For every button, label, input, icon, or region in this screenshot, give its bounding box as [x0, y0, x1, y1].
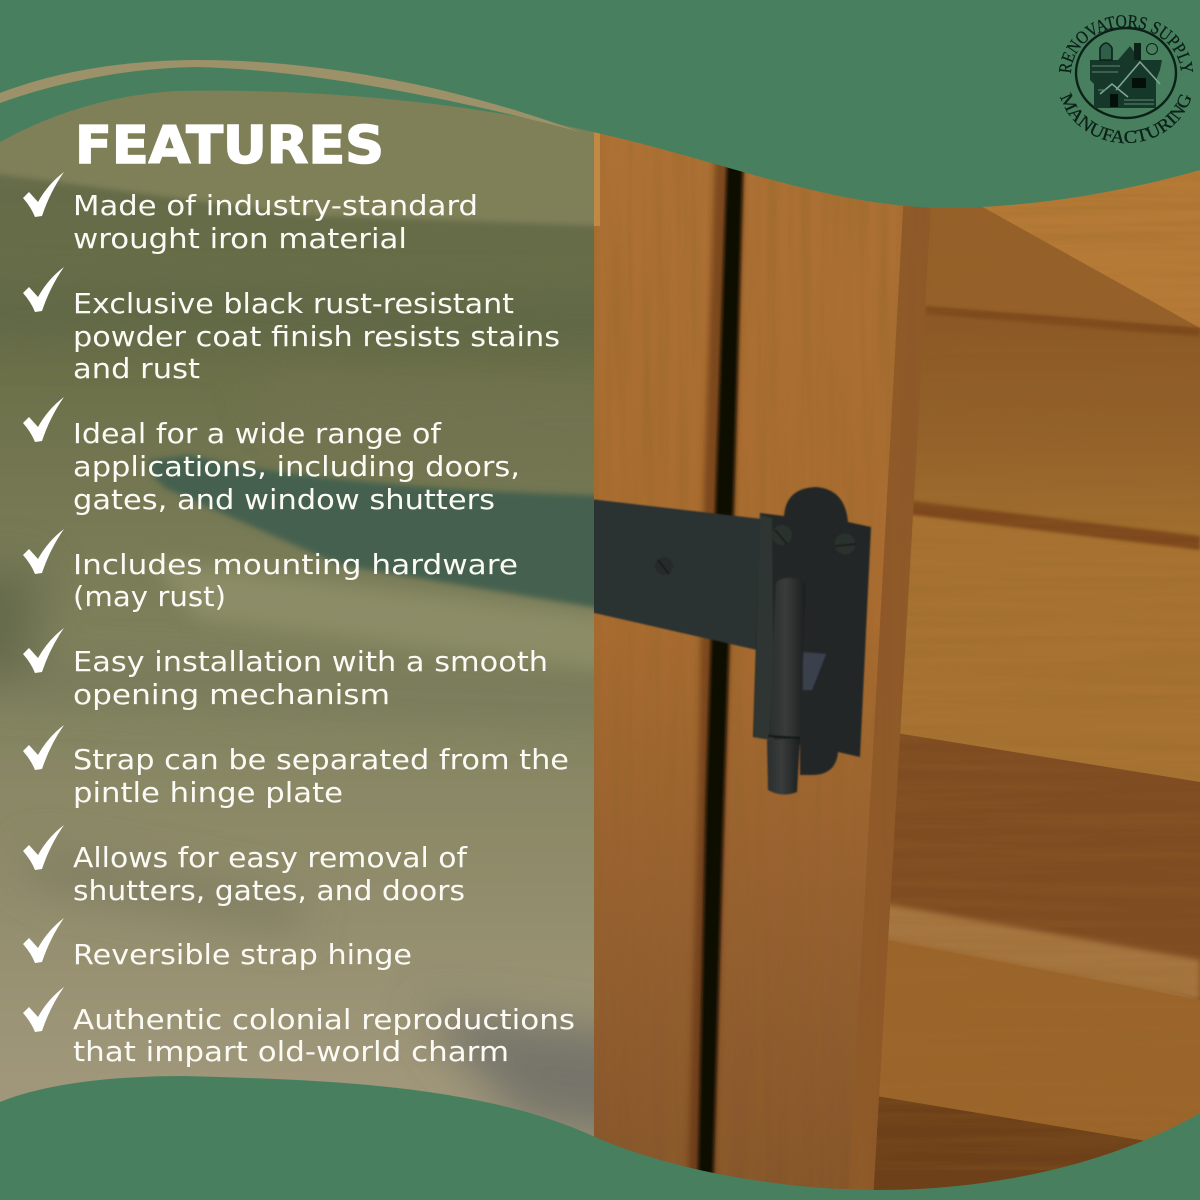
edge highlight	[594, 130, 600, 226]
feature 4: Includes mounting hardware	[73, 549, 518, 581]
feature 1	[23, 172, 478, 255]
feature 2	[23, 267, 560, 385]
feature 3: Ideal for a wide range of	[73, 418, 442, 450]
feature 3: gates, and window shutters	[73, 484, 495, 516]
feature 8: Reversible strap hinge	[73, 939, 412, 971]
logo text: RENOVATORS SUPPLY	[1058, 14, 1194, 74]
feature 3: applications, including doors,	[73, 451, 520, 483]
feature 2: Exclusive black rust-resistant	[73, 288, 514, 320]
top green wave	[0, 0, 1200, 208]
heading: features: FEATURES	[75, 116, 384, 176]
light upper plank	[0, 90, 594, 227]
door boards	[590, 120, 732, 1200]
feature 5: opening mechanism	[73, 679, 390, 711]
feature 7: shutters, gates, and doors	[73, 875, 465, 907]
feature 1: wrought iron material	[73, 223, 407, 255]
feature 9	[23, 987, 575, 1068]
feature 3	[23, 397, 520, 516]
feature 9: that impart old-world charm	[73, 1036, 509, 1068]
feature 7: Allows for easy removal of	[73, 842, 468, 874]
hinge	[590, 487, 871, 795]
feature 1: Made of industry-standard	[73, 190, 478, 222]
strap	[590, 499, 762, 650]
light band under blurred strap	[163, 562, 594, 666]
icon: house	[1090, 43, 1162, 108]
feature 4: (may rust)	[73, 581, 226, 613]
feature 5	[23, 628, 548, 711]
blurred strap shape	[146, 452, 594, 610]
feature list	[23, 172, 575, 1068]
feature 6	[23, 725, 569, 809]
pintle pin	[769, 578, 806, 738]
feature 5: Easy installation with a smooth	[73, 646, 548, 678]
background: wooden shutter photo	[594, 132, 1200, 1190]
hinge plate	[753, 487, 871, 775]
feature 7	[23, 825, 468, 907]
bottom green wave	[0, 1076, 1200, 1200]
gap shadow	[688, 130, 745, 1180]
logo: Renovators Supply Manufacturing	[1058, 14, 1194, 144]
darker bands	[0, 313, 594, 1136]
feature 4	[23, 529, 518, 613]
louver slats	[860, 170, 1200, 1200]
tan ribbon arc	[0, 60, 580, 132]
feature 2: powder coat finish resists stains	[73, 321, 560, 353]
logo: Renovators Supply Manufacturing: MANUFACTURING	[1060, 92, 1191, 144]
feature 8	[23, 918, 412, 971]
feature 9: Authentic colonial reproductions	[73, 1004, 575, 1036]
feature 6: Strap can be separated from the	[73, 744, 569, 776]
feature 6: pintle hinge plate	[73, 777, 343, 809]
feature 2: and rust	[73, 353, 200, 385]
gap between boards	[698, 130, 744, 1180]
panel: blurred features background	[0, 90, 594, 1136]
